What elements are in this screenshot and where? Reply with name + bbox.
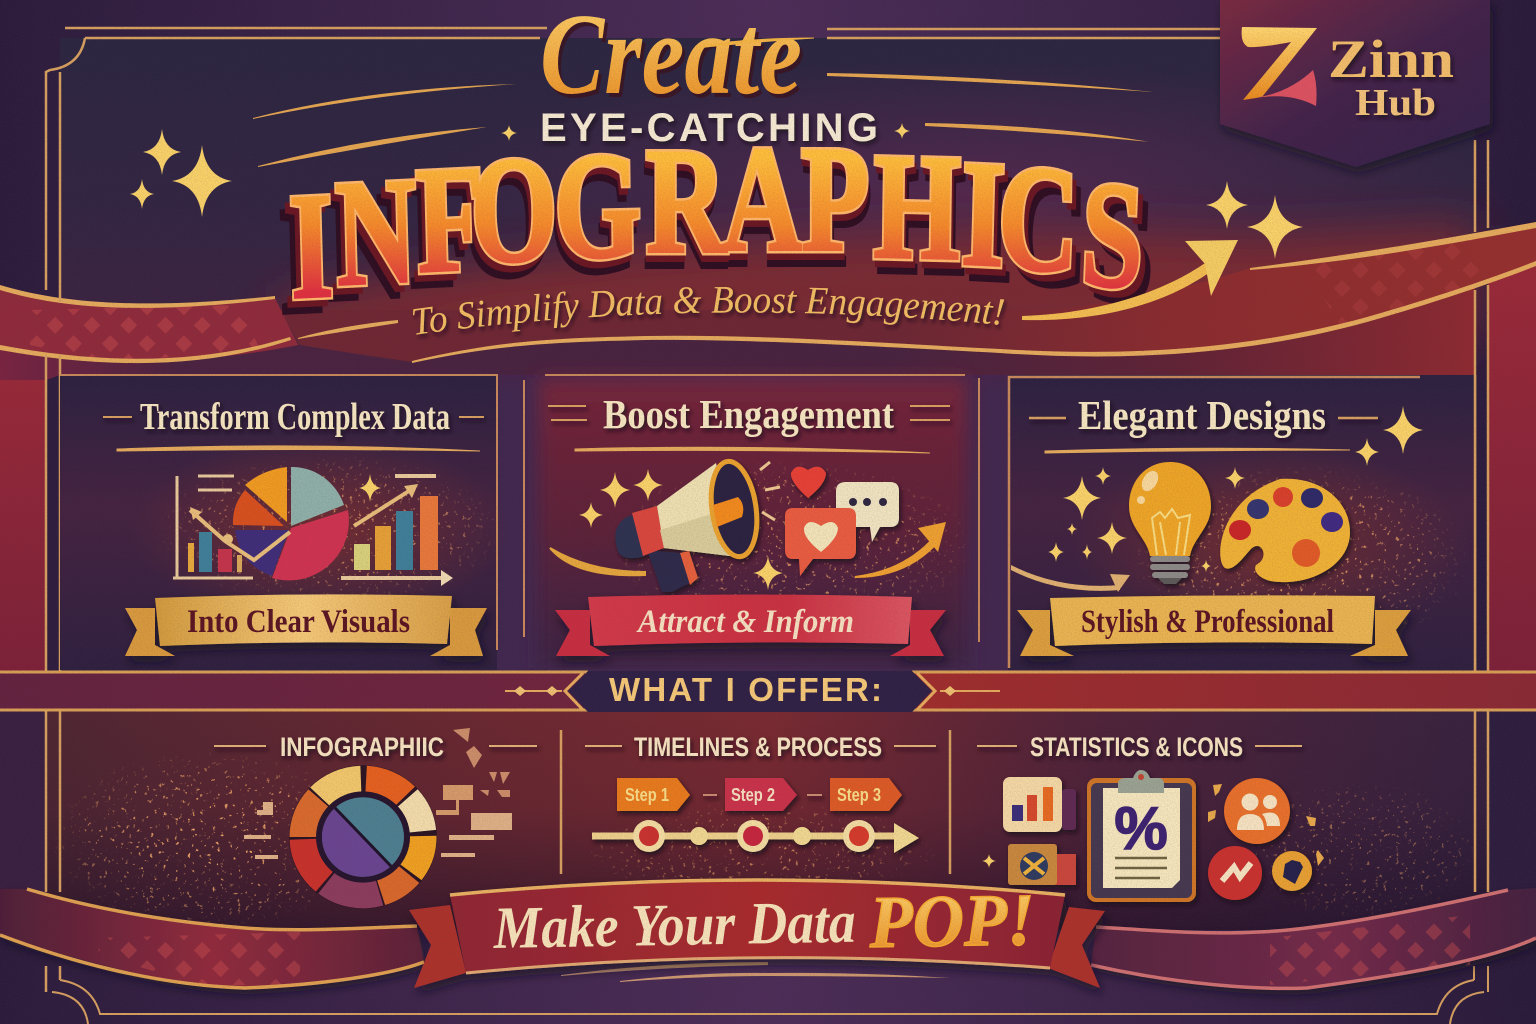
icon: bar card [1003,777,1076,832]
icon: clipboard [1087,770,1196,902]
banner: into clear visuals: Into Clear Visuals [187,604,410,640]
heading: Transform Complex Data [140,396,450,438]
panel: transform complex data [60,375,510,670]
sparkles [1048,406,1423,572]
icon: gold badge [1272,851,1312,891]
icon: megaphone [615,458,762,592]
heading: TIMELINES & PROCESS [634,732,882,762]
panel: boost engagement [524,375,979,668]
icon: Z mark [1242,27,1317,106]
title: eye-catching: EYE-CATCHING [540,106,878,150]
banner: attract and inform [555,594,946,656]
steps [617,778,902,811]
icon: clipboard: % [1114,795,1168,862]
logo: Zinn [1328,29,1454,89]
heading: INFOGRAPHIIC [280,732,444,762]
timeline [592,820,919,853]
arrow: growth [1022,240,1238,320]
icon: floating blocks [244,728,512,859]
title: infographics: INFOGRAPHICS [288,114,1147,331]
heading: Boost Engagement [603,391,894,437]
bottom ribbons [0,888,1536,988]
logo [1220,0,1490,167]
icon: light bulb [1129,462,1211,584]
title: infographics: INFOGRAPHICS [282,121,1152,338]
icon: folder [1008,844,1076,885]
arrow: curved [1011,565,1130,592]
tagline: To Simplify Data & Boost Engagement! [413,287,1008,340]
icon: trend badge [1208,846,1262,900]
top ribbon [0,222,1536,380]
steps: Step 2 [731,785,775,805]
logo: Hub [1355,82,1436,124]
banner: make your data pop: Make Your Data [492,889,856,961]
heading: STATISTICS & ICONS [1030,732,1243,762]
banner: stylish and professional [1017,595,1411,656]
heading: Elegant Designs [1078,392,1326,438]
icon: people badge [1224,778,1290,844]
panel: elegant designs [1008,375,1475,670]
icon: chat bubbles [785,467,899,576]
sparkles: title [130,123,1303,259]
banner: attract and inform: Attract & Inform [636,604,854,640]
banner: make your data pop: POP! [868,879,1035,964]
banner: make your data pop [409,879,1105,988]
arrow: engagement [855,522,946,578]
lower section background [0,710,1536,930]
icon: sparkles [550,462,783,590]
panel: infographic [214,728,950,919]
title: infographics: INFOGRAPHICS [288,114,1147,331]
chart: pie and bars [173,467,453,586]
title: infographics: INFOGRAPHICS [277,128,1157,345]
panel: statistics and icons [977,732,1324,902]
panel: timelines and process [585,732,936,853]
band: what i offer [0,671,1536,712]
steps: Step 3 [837,785,881,805]
banner: into clear visuals [125,594,487,656]
title: swoosh accents [253,73,1153,167]
banner: stylish and professional: Stylish & Professional [1081,604,1334,640]
steps: Step 1 [625,785,669,805]
band: what i offer: WHAT I OFFER: [609,671,882,708]
icon: paint palette [1220,479,1350,582]
sparkle bits [982,784,1324,868]
chart: donut [278,755,448,919]
